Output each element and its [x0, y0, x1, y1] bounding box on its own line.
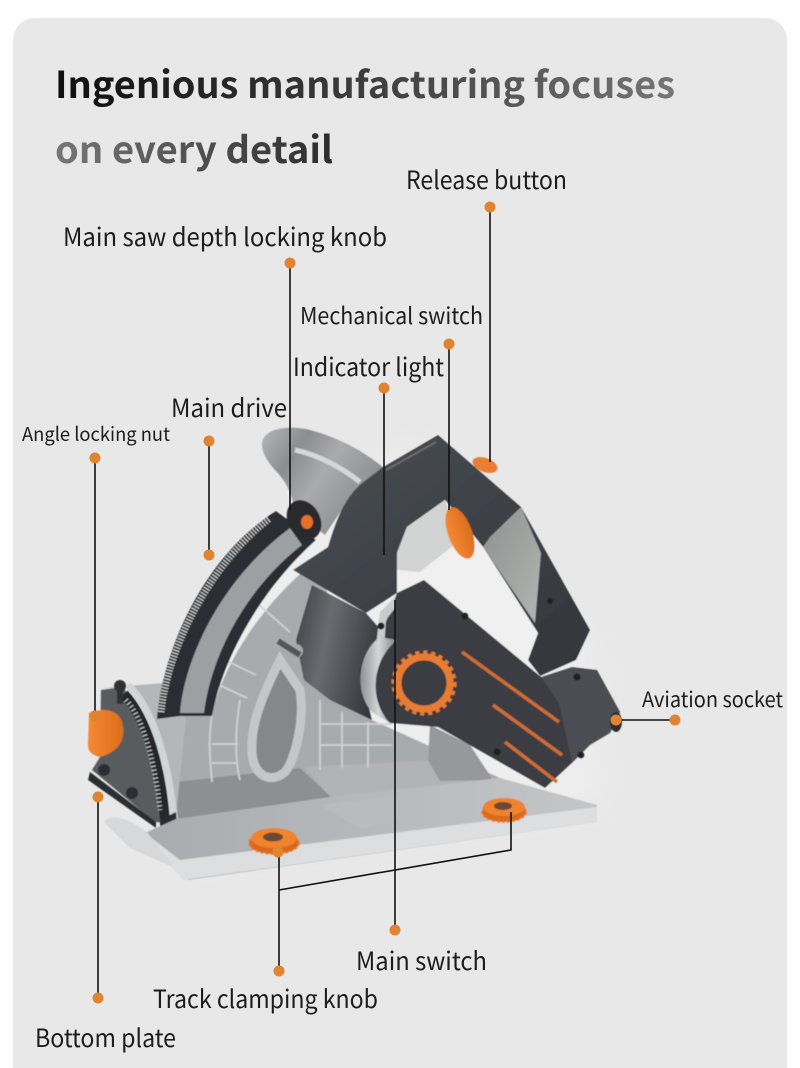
callout: Main saw depth locking knob: Main saw depth locking knob: [63, 218, 387, 254]
base plate: [145, 778, 597, 880]
callout: Mechanical switch: [300, 297, 483, 510]
callout: Mechanical switch: Mechanical switch: [300, 297, 483, 331]
right track clamping knob: [482, 798, 526, 822]
body screws: [378, 598, 584, 758]
callout: Main saw depth locking knob: [63, 218, 387, 510]
product illustration: track saw: [88, 428, 622, 880]
side silver strip: [376, 597, 395, 650]
left bracket: [92, 687, 168, 823]
callout: Bottom plate: Bottom plate: [35, 1019, 176, 1055]
blade slot with light band: [252, 660, 301, 778]
handle silver inner panel: [483, 507, 541, 623]
orange mechanical switch: [439, 504, 481, 562]
callout: Angle locking nut: Angle locking nut: [22, 420, 170, 447]
handle inner light opening: [397, 500, 541, 677]
callout: Indicator light: Indicator light: [293, 348, 445, 384]
callout: Angle locking nut: [22, 420, 170, 722]
callout: Release button: Release button: [406, 161, 567, 197]
under-arm bracket: [428, 725, 493, 781]
title: on every detail: [55, 120, 333, 174]
angle locking nut knob: [88, 710, 123, 757]
motor: [296, 585, 390, 720]
rear blade guard: [262, 428, 384, 535]
casting ribs: [210, 604, 392, 782]
base casting: [160, 560, 500, 819]
orange release button: [470, 454, 500, 476]
callout: Main drive: Main drive: [171, 389, 287, 425]
angle scale ticks: [126, 700, 160, 810]
orange gear: [398, 657, 450, 709]
left track clamping knob: [249, 828, 299, 854]
aviation socket: [610, 712, 622, 732]
callout: Track clamping knob: Track clamping knob: [153, 980, 378, 1016]
callout: Main drive: [171, 389, 287, 560]
title: Ingenious manufacturing focuses: [55, 55, 675, 109]
callout: Aviation socket: [610, 684, 783, 726]
gear housing silver ring: [360, 637, 397, 723]
title: [55, 55, 675, 174]
tail housing: [541, 667, 620, 763]
callout: Aviation socket: Aviation socket: [642, 684, 783, 714]
casting floor: [176, 768, 331, 819]
handle body: [293, 435, 590, 677]
curved depth scale arc: [157, 511, 316, 719]
callout: Main switch: Main switch: [356, 942, 487, 978]
callout: Track clamping knob: [153, 812, 511, 1016]
callout: Indicator light: [293, 348, 445, 555]
callout: Bottom plate: [35, 792, 176, 1055]
callout: Main switch: [356, 600, 487, 978]
depth locking knob: [280, 494, 328, 546]
callout: Release button: [406, 161, 567, 462]
orange stripes: [462, 652, 562, 782]
gear housing arm: [359, 580, 620, 788]
